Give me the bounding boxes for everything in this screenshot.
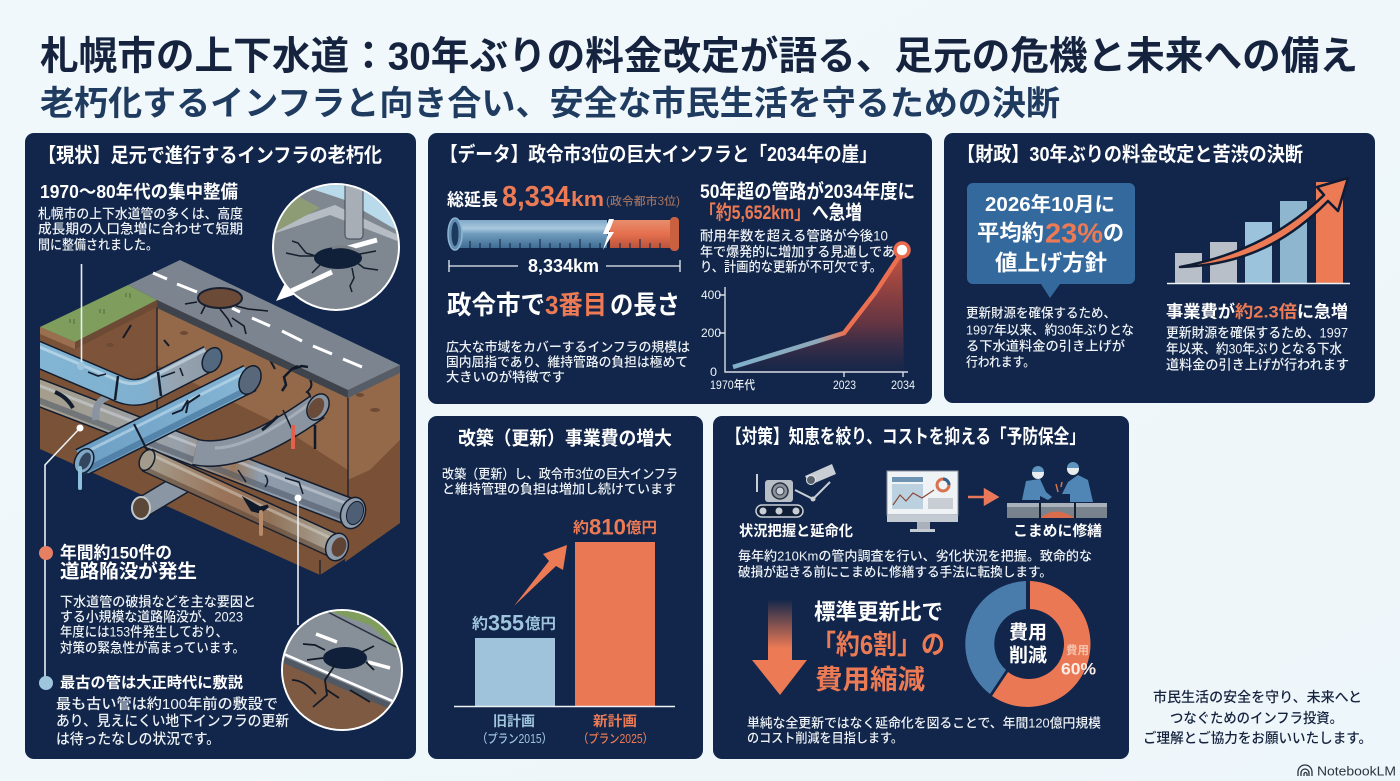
marker: oldest pipe (39, 676, 53, 690)
bar chart: rising costs (1167, 178, 1350, 284)
bar chart: plan comparison: 約 (472, 616, 488, 632)
bar chart: plan comparison: 億円 (626, 518, 657, 536)
callout: 60% reduction: 費用縮減 (815, 665, 925, 695)
text block: road collapses: 対策の緊急性が高まっています。 (60, 640, 245, 656)
illustration: underground pipe cross-section (30, 260, 400, 575)
callout: 23% increase: 23% (1045, 218, 1103, 248)
icon: monitor dashboard (887, 471, 958, 532)
callout leader lines (45, 264, 302, 682)
bar chart: plan comparison: 約 (573, 520, 589, 536)
donut chart: cost share: 60% (1061, 660, 1096, 678)
dimension line: 8,334km: 8,334km (528, 256, 599, 276)
callout: cost 2.3x (1166, 302, 1348, 322)
text block: scale description: 大きいのが特徴です (446, 370, 565, 384)
heading: 2034 cliff: 「約5,652km」 (700, 202, 810, 224)
text block: cost description: 道料金の引き上げが行われます (1166, 356, 1349, 372)
bar chart: plan comparison: 億円 (525, 614, 556, 632)
panel: current state (25, 133, 416, 759)
text block: cliff description: り、計画的な更新が不可欠です。 (700, 258, 882, 274)
total length figure: km (571, 189, 604, 211)
callout: 23% increase: 2026年10月に (985, 193, 1115, 216)
text block: oldest pipes: 最も古い管は約100年前の敷設で (56, 695, 278, 713)
closing message: 市民生活の安全を守り、未来へと (1153, 689, 1362, 705)
text block: price revision: 更新財源を確保するため、 (966, 306, 1116, 320)
text block: scale description: 広大な市域をカバーするインフラの規模は (446, 340, 690, 354)
heading: 2034 cliff: 50年超の管路が2034年度に (700, 180, 915, 203)
total length figure: 総延長 (447, 190, 498, 210)
line chart: aged pipes: 2034 (891, 378, 915, 392)
closing message (1143, 689, 1372, 746)
line chart: aged pipes: 200 (701, 326, 721, 340)
text block: cost description: 更新財源を確保するため、1997 (1166, 326, 1348, 340)
arrow: increase (514, 545, 567, 606)
text block: survey: 破損が起きる前にこまめに修繕する手法に転換します。 (738, 564, 1052, 580)
callout: third longest: 政令市で (447, 290, 545, 320)
text block: cliff description: 年で爆発的に増加する見通しであ (700, 244, 895, 260)
text block: cost description: 年以来、約30年ぶりとなる下水 (1166, 340, 1342, 356)
pipe: long blue (70, 362, 265, 488)
panel background (944, 133, 1375, 403)
text block: cliff description: 耐用年数を超える管路が今後10 (700, 228, 888, 244)
text block: intensive construction: 札幌市の上下水道管の多くは、高度 (38, 206, 243, 222)
line chart: aged pipes: 2023 (833, 378, 856, 392)
callout: third longest: の長さ (610, 290, 680, 320)
panel: countermeasures (713, 416, 1129, 759)
text block: road collapses: する小規模な道路陥没が、2023 (60, 608, 243, 624)
line chart: aged pipes: 1970年代 (710, 378, 755, 392)
line chart: aged pipes (701, 243, 915, 392)
text block: oldest pipes: 最古の管は大正時代に敷説 (60, 674, 243, 692)
text block: renovation description: と維持管理の負担は増加し続けています (442, 482, 676, 496)
pipe: connector behind (96, 394, 135, 420)
panel: data (428, 133, 932, 404)
subtitle: 老朽化するインフラと向き合い、安全な市民生活を守るための決断 (40, 85, 1060, 123)
bar chart: plan comparison: 旧計画 (493, 713, 535, 729)
text block: renovation description: 改築（更新）し、政令市3位の巨大インフラ (442, 466, 678, 482)
title: 札幌市の上下水道：30年ぶりの料金改定が語る、足元の危機と未来への備え (40, 36, 1358, 78)
total length figure (447, 181, 680, 213)
bar chart: plan comparison (454, 514, 675, 746)
text block: oldest pipes (56, 674, 289, 748)
NotebookLM logo: NotebookLM (1317, 764, 1396, 778)
callout: third longest: 3番目 (545, 290, 607, 320)
callout: 23% increase (967, 183, 1135, 298)
heading: 2034 cliff (700, 180, 915, 224)
panel heading: 【対策】知恵を絞り、コストを抑える「予防保全」 (726, 426, 1085, 448)
text block: road collapses (60, 542, 256, 656)
text block: intensive construction: 成長期の人口急増に合わせて短期 (38, 220, 243, 236)
icon: inspection robot and camera (756, 464, 836, 517)
donut chart: cost share: 費用 (1066, 643, 1089, 657)
bar chart: plan comparison: 810 (589, 514, 626, 540)
text block: oldest pipes: は待ったなしの状況です。 (56, 731, 220, 748)
panel background (713, 416, 1129, 759)
text block: scale description: 国内屈指であり、維持管路の負担は極めて (446, 354, 688, 370)
closing message: つなぐためのインフラ投資。 (1170, 710, 1343, 726)
text block: renovation description (442, 466, 678, 496)
text block: cliff description (700, 228, 895, 274)
text block: road collapses: 下水道管の破損などを主な要因と (60, 594, 256, 610)
line chart: aged pipes: 0 (710, 365, 717, 379)
callout: cost 2.3x: に急増 (1297, 302, 1348, 322)
inset: road collapse close-up (270, 180, 402, 314)
panel heading: 【財政】30年ぶりの料金改定と苦渋の決断 (957, 143, 1303, 166)
donut chart: cost share (965, 581, 1096, 707)
panel heading: 改築（更新）事業費の増大 (458, 426, 672, 450)
text block: scale description (446, 340, 690, 384)
text block: price revision (966, 306, 1134, 370)
road (128, 260, 400, 398)
callout: 60% reduction: 標準更新比で (814, 600, 943, 624)
panel background (428, 416, 703, 759)
closing message: ご理解とご協力をお願いいたします。 (1143, 730, 1372, 746)
grass (40, 285, 157, 349)
bar chart: plan comparison: （プラン2015） (477, 732, 552, 746)
arrow: cost reduction (752, 599, 807, 695)
bar chart: plan comparison: （プラン2025） (578, 732, 653, 746)
callout: cost 2.3x: 事業費が (1166, 302, 1235, 322)
text block: cost description (1166, 326, 1349, 372)
callout: 23% increase: 値上げ方針 (995, 250, 1107, 276)
text block: savings: 単純な全更新ではなく延命化を図ることで、年間120億円規模 (747, 716, 1101, 730)
inset: crack close-up (280, 608, 404, 740)
total length figure: (政令都市3位) (606, 194, 680, 208)
dimension line: 8,334km (449, 256, 680, 276)
panel background (428, 133, 932, 404)
callout: 23% increase: の (1103, 220, 1124, 246)
donut chart: cost share: 費用 (1009, 622, 1047, 644)
text block: survey (738, 548, 1092, 580)
panel: renovation cost (428, 416, 703, 759)
text block: road collapses: 年間約150件の (60, 542, 172, 562)
text block: road collapses: 年度には153件発生しており、 (60, 624, 228, 640)
text block: price revision: 1997年以来、約30年ぶりとな (966, 322, 1134, 338)
heading: 2034 cliff: へ急増 (812, 201, 862, 224)
text block: survey: 毎年約210Kmの管内調査を行い、劣化状況を把握。致命的な (738, 548, 1092, 564)
soil block (40, 300, 400, 575)
text block: intensive construction (38, 181, 243, 252)
callout: third longest (447, 290, 680, 320)
total length figure: 8,334 (502, 181, 570, 213)
pipe: lower rusty pipe (132, 447, 352, 564)
panel: finance (944, 133, 1375, 403)
icon: pipe ruler (448, 217, 679, 251)
pipe: blue elbow (30, 343, 226, 400)
panel heading: 【現状】足元で進行するインフラの老朽化 (38, 144, 382, 167)
text block: price revision: る下水道料金の引き上げが (966, 338, 1125, 354)
icon: workers repairing pipe (1007, 462, 1107, 518)
text block: road collapses: 道路陥没が発生 (60, 560, 197, 582)
pipe: rusty elbow (195, 390, 334, 454)
text block: savings: のコスト削減を目指します。 (747, 730, 903, 746)
text block: intensive construction: 1970〜80年代の集中整備 (40, 181, 238, 202)
text block: intensive construction: 間に整備されました。 (38, 238, 158, 252)
line chart: aged pipes: 400 (701, 288, 721, 302)
callout: 23% increase: 平均約 (977, 220, 1044, 246)
text block: oldest pipes: あり、見えにくい地下インフラの更新 (56, 713, 289, 730)
bar chart: plan comparison: 新計画 (593, 713, 637, 729)
arrow: monitor to repair (968, 490, 997, 504)
pipe: long grey-tan main (30, 382, 370, 532)
panel heading: 【データ】政令市3位の巨大インフラと「2034年の崖」 (440, 142, 877, 166)
text block: savings (747, 716, 1101, 746)
panel background (25, 133, 416, 759)
callout: 60% reduction: 「約6割」の (812, 630, 945, 660)
donut chart: cost share: 削減 (1009, 644, 1047, 666)
icon labels (739, 522, 1103, 540)
text block: price revision: 行われます。 (966, 354, 1035, 370)
callout: 60% reduction (812, 600, 945, 695)
callout: cost 2.3x: 約2.3倍 (1235, 302, 1297, 322)
bar chart: plan comparison: 355 (488, 610, 524, 636)
icon labels: こまめに修繕 (1013, 522, 1103, 540)
marker: collapse count (39, 546, 53, 560)
icon labels: 状況把握と延命化 (739, 522, 853, 540)
